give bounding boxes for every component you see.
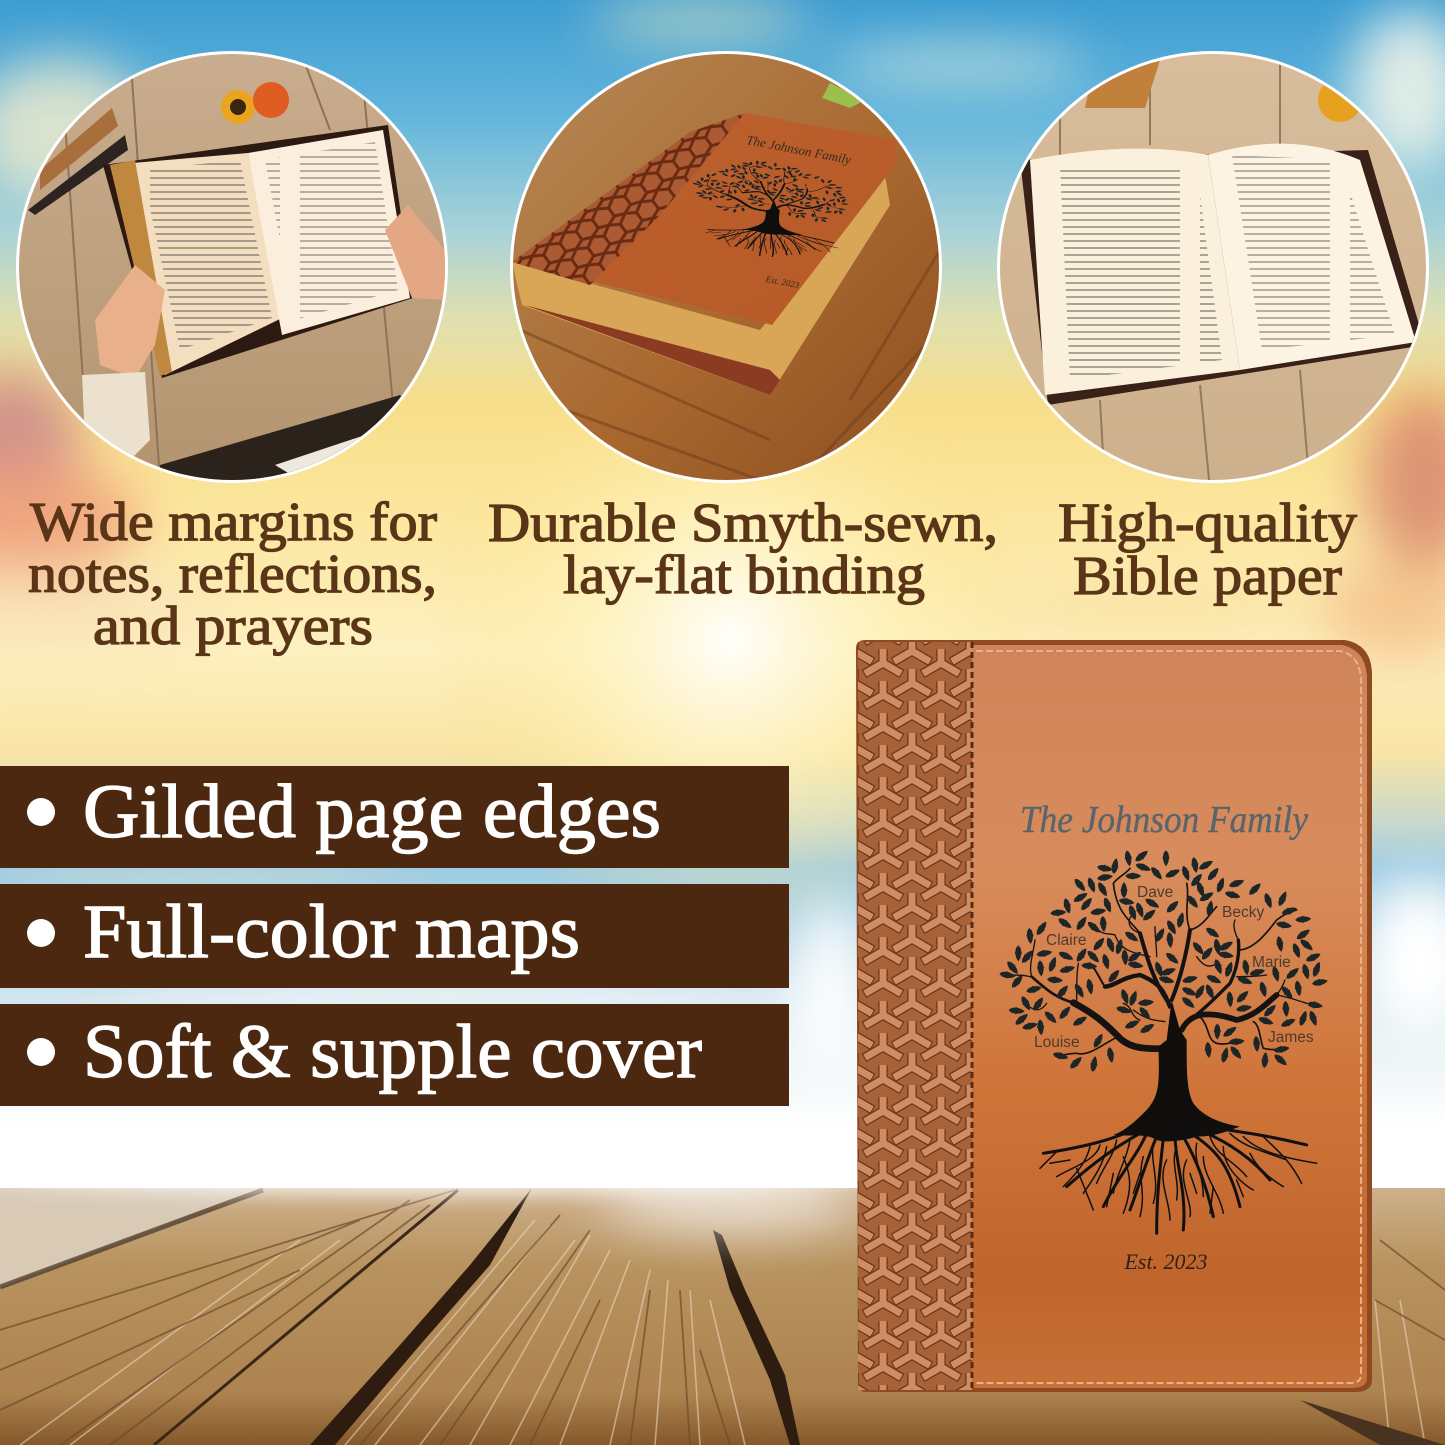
established date: Est. 2023 — [1123, 1249, 1208, 1274]
family name: The Johnson Family — [1020, 799, 1308, 841]
feature bar: gilded page edges: Gilded page edges — [83, 770, 661, 854]
names on tree: Dave — [1137, 884, 1173, 901]
caption: paper — [1058, 492, 1358, 606]
feature bar: full-color maps — [0, 884, 789, 988]
feature bar: full-color maps: Full-color maps — [83, 890, 580, 974]
caption: paper: High-quality — [1058, 492, 1358, 553]
photo circle: open Bible held in hands — [15, 50, 450, 490]
small date: Est. 2023 — [764, 274, 801, 290]
small cover title: The Johnson Family — [745, 132, 853, 167]
feature bar: soft cover: Soft & supple cover — [83, 1010, 702, 1094]
caption: binding: lay-flat binding — [563, 544, 925, 605]
names on tree: Louise — [1034, 1034, 1080, 1051]
photo circle: closed leather Bible — [510, 50, 945, 485]
names on tree: James — [1268, 1029, 1314, 1046]
names on tree: Marie — [1252, 954, 1291, 971]
names on tree: Becky — [1222, 904, 1264, 921]
caption: wide margins: and prayers — [93, 595, 373, 656]
family tree emblem — [999, 848, 1328, 1233]
caption: wide margins — [28, 491, 437, 656]
feature bar: gilded page edges — [0, 766, 789, 868]
caption: wide margins: Wide margins for — [30, 491, 437, 552]
caption: binding — [488, 492, 998, 605]
caption: paper: Bible paper — [1073, 545, 1342, 606]
photo circle: open Bible on table — [995, 50, 1430, 490]
feature bar: soft cover — [0, 1004, 789, 1106]
embossed spine pattern — [858, 642, 972, 1390]
names on tree: Claire — [1046, 932, 1086, 949]
cover panel — [970, 645, 1367, 1388]
small tree emblem — [692, 160, 849, 257]
caption: wide margins: notes, reflections, — [28, 543, 437, 604]
names on tree — [1034, 884, 1314, 1051]
caption: binding: Durable Smyth-sewn, — [488, 492, 998, 553]
wooden table foreground — [0, 1142, 1445, 1445]
personalized leather Bible — [856, 640, 1372, 1392]
